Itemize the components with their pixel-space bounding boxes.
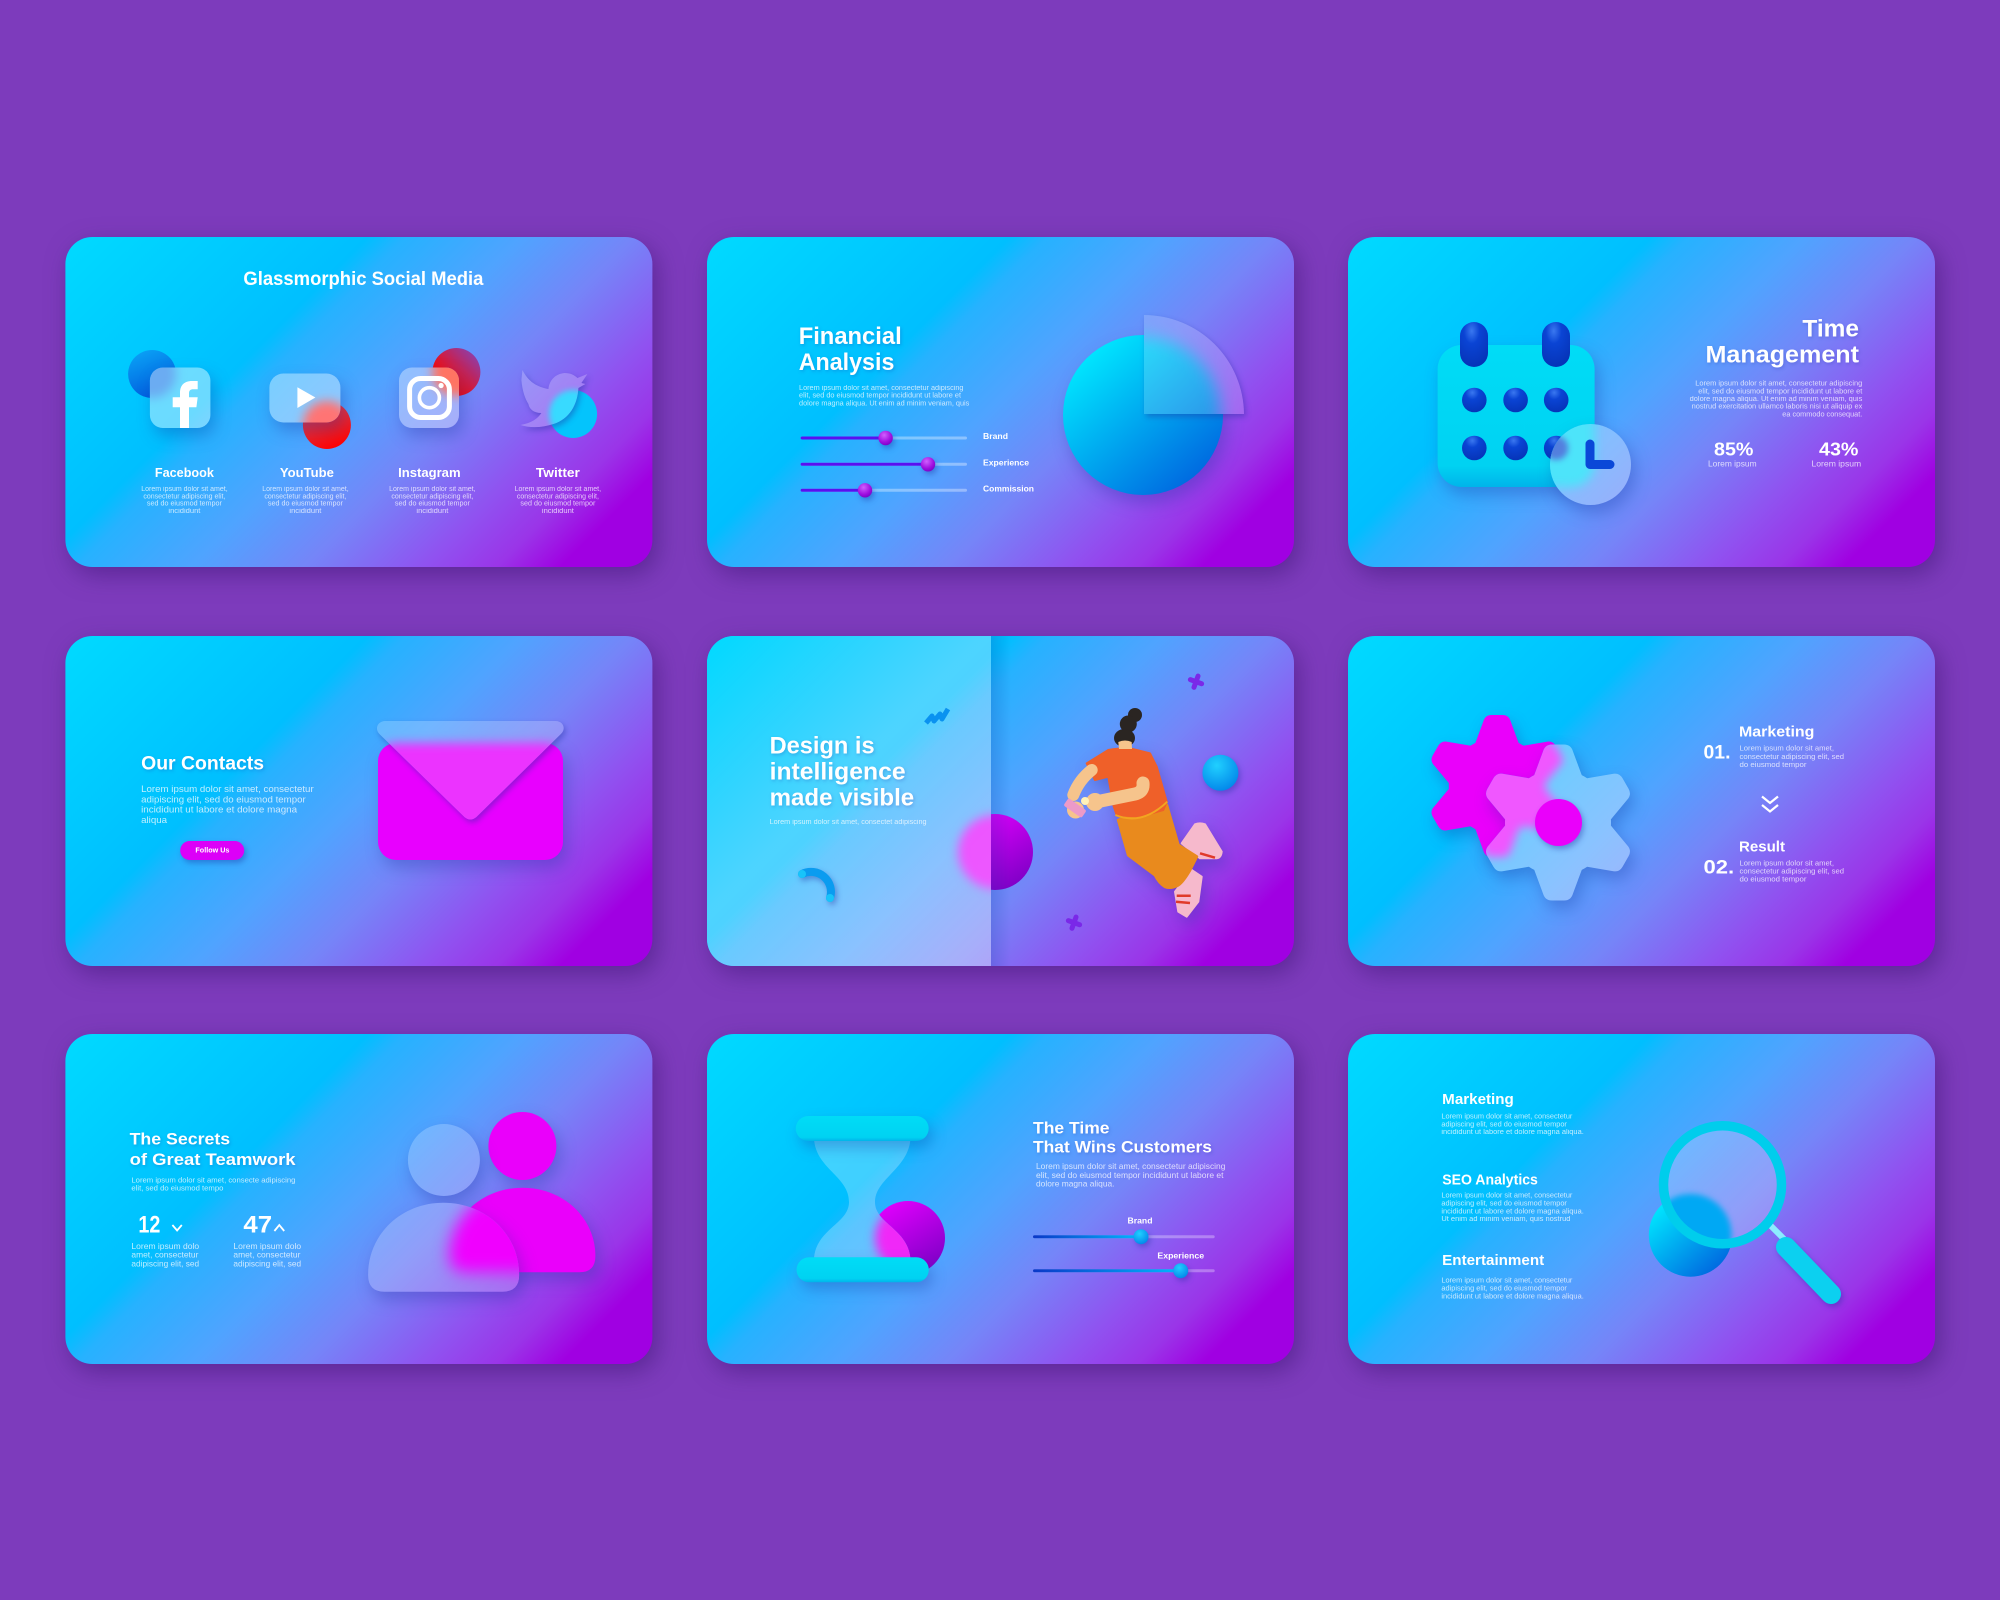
- heading: intelligence: [770, 758, 906, 785]
- icon: hourglass glass: [814, 1141, 910, 1258]
- arrow: double chevron: [1762, 796, 1778, 812]
- panel: gears steps: [1348, 636, 1935, 966]
- item: marketing: Marketing: [1442, 1091, 1514, 1108]
- text block: [131, 1175, 295, 1193]
- text: youtube description: consectetur adipiscing elit,: [264, 493, 346, 500]
- stat: 12: [131, 1212, 199, 1269]
- text: youtube description: [262, 486, 349, 515]
- panel: financial analysis: [707, 237, 1294, 567]
- text: twitter description: consectetur adipiscing elit,: [517, 493, 599, 500]
- icon: glass person: [368, 1124, 532, 1306]
- slider: brand: [1033, 1216, 1215, 1244]
- heading: [770, 732, 914, 812]
- item: entertainment: [1441, 1252, 1584, 1300]
- panel edge: [991, 636, 1011, 966]
- text: instagram description: incididunt: [416, 508, 448, 515]
- card background: [707, 237, 1294, 567]
- stat: 47: amet, consectetur: [233, 1250, 301, 1260]
- panel: glassmorphic social media: [65, 237, 652, 567]
- item: marketing: [1441, 1091, 1584, 1136]
- title: Glassmorphic Social Media: [243, 269, 484, 290]
- heading: Financial: [799, 323, 902, 350]
- button: follow us: Follow Us: [195, 848, 230, 855]
- card background: [707, 636, 1294, 966]
- text block: nostrud exercitation ullamco laboris nisi ut aliquip ex: [1692, 404, 1863, 411]
- label: twitter: Twitter: [536, 465, 580, 480]
- figure: floating person: [1063, 708, 1222, 917]
- step 02: [1704, 839, 1844, 884]
- icon: clock: [1546, 424, 1640, 518]
- item: seo analytics: [1441, 1171, 1584, 1223]
- stat: 12: Lorem ipsum dolo: [131, 1241, 199, 1251]
- text block: elit, sed do eiusmod tempor incididunt ut labore et: [1036, 1170, 1224, 1180]
- text block: Lorem ipsum dolor sit amet, consectetur adipiscing: [799, 385, 964, 392]
- card background: [65, 636, 652, 966]
- text: youtube description: Lorem ipsum dolor sit amet,: [262, 486, 349, 493]
- text block: [799, 385, 970, 407]
- stat: 85%: Lorem ipsum: [1708, 460, 1757, 469]
- icon: calendar: [1438, 322, 1595, 487]
- step 02: 02.: [1704, 857, 1734, 878]
- icon: youtube: [267, 374, 351, 449]
- heading: [130, 1130, 296, 1169]
- step 01: 01.: [1704, 742, 1730, 763]
- item: entertainment: Lorem ipsum dolor sit amet, consectetur: [1441, 1278, 1573, 1285]
- item: seo analytics: SEO Analytics: [1442, 1171, 1538, 1188]
- text block: incididunt ut labore et dolore magna: [141, 805, 298, 816]
- gear centre: [1535, 799, 1582, 846]
- heading: Time: [1802, 316, 1859, 343]
- text block: dolore magna aliqua. Ut enim ad minim veniam, quis: [1690, 396, 1863, 403]
- text: youtube description: sed do eiusmod tempor: [268, 501, 344, 508]
- text: youtube description: incididunt: [289, 508, 321, 515]
- text block: [1690, 381, 1863, 418]
- slider: commission: Commission: [983, 484, 1034, 493]
- text block: ea commodo consequat.: [1782, 411, 1862, 418]
- panel: hourglass: [707, 1034, 1294, 1364]
- shape: arc: [798, 870, 834, 902]
- heading: made visible: [770, 785, 914, 812]
- item: entertainment: incididunt ut labore et dolore magna aliqua.: [1441, 1293, 1584, 1300]
- stat: 43%: [1812, 440, 1862, 469]
- text: facebook description: consectetur adipiscing elit,: [143, 493, 225, 500]
- item: marketing: Lorem ipsum dolor sit amet, consectetur: [1441, 1114, 1573, 1121]
- text block: elit, sed do eiusmod tempo: [131, 1184, 223, 1193]
- text: twitter description: incididunt: [542, 508, 574, 515]
- stat: 12: amet, consectetur: [131, 1250, 199, 1260]
- text block: [141, 784, 314, 826]
- step 02: Result: [1739, 839, 1785, 856]
- shape: plus top: [1188, 674, 1204, 689]
- button: follow us: [180, 841, 244, 860]
- text: instagram description: Lorem ipsum dolor sit amet,: [389, 486, 476, 493]
- card background: [1348, 237, 1935, 567]
- stat: 85%: [1708, 440, 1757, 469]
- text: facebook description: [141, 486, 228, 515]
- glass panel: [707, 636, 991, 966]
- stat: 47: 47: [243, 1212, 272, 1239]
- item: marketing: adipiscing elit, sed do eiusmod tempor: [1441, 1122, 1568, 1129]
- label: facebook: Facebook: [155, 465, 215, 480]
- panel: marketing seo entertainment: [1348, 1034, 1935, 1364]
- slider: brand: Brand: [1128, 1216, 1152, 1226]
- text block: elit, sed do eiusmod tempor incididunt ut labore et: [799, 393, 961, 400]
- card background: [1348, 1034, 1935, 1364]
- slider: experience: Experience: [1157, 1250, 1204, 1260]
- shape: plus bottom: [1066, 915, 1082, 930]
- text block: Lorem ipsum dolor sit amet, consectetur: [141, 784, 314, 795]
- slider: brand: [801, 431, 1008, 445]
- sphere: blue: [1202, 755, 1238, 791]
- sphere: blue: [1649, 1193, 1732, 1277]
- step 01: Marketing: [1739, 724, 1814, 741]
- text: instagram description: sed do eiusmod tempor: [395, 501, 471, 508]
- heading: That Wins Customers: [1033, 1137, 1212, 1156]
- icon: instagram: [397, 348, 480, 441]
- text block: Lorem ipsum dolor sit amet, consectetur adipiscing: [1695, 381, 1862, 388]
- panel: our contacts: [65, 636, 652, 966]
- stat: 47: [233, 1212, 301, 1269]
- card background: [707, 1034, 1294, 1364]
- icon: facebook: [128, 350, 222, 444]
- card background: [1348, 636, 1935, 966]
- stat: 12: adipiscing elit, sed: [131, 1259, 199, 1269]
- heading: [1033, 1118, 1212, 1156]
- icon: hourglass bottom bar: [796, 1257, 929, 1282]
- heading: Our Contacts: [141, 753, 264, 774]
- text block: dolore magna aliqua. Ut enim ad minim veniam, quis: [799, 400, 970, 407]
- card background: [65, 1034, 652, 1364]
- text block: adipiscing elit, sed do eiusmod tempor: [141, 794, 306, 805]
- item: marketing: incididunt ut labore et dolore magna aliqua.: [1441, 1129, 1584, 1136]
- step 01: Lorem ipsum dolor sit amet,: [1740, 744, 1834, 753]
- heading: The Time: [1033, 1118, 1110, 1137]
- text: twitter description: Lorem ipsum dolor sit amet,: [515, 486, 601, 493]
- sphere: magenta: [871, 1201, 945, 1275]
- icon: envelope: [376, 721, 574, 874]
- icon: magnifier: [1658, 1121, 1846, 1310]
- step 02: consectetur adipiscing elit, sed: [1740, 867, 1844, 876]
- stat: 12: 12: [138, 1212, 160, 1239]
- slider: commission: [801, 483, 1034, 498]
- text: instagram description: consectetur adipiscing elit,: [391, 493, 473, 500]
- stat: 47: Lorem ipsum dolo: [233, 1241, 301, 1251]
- text: twitter description: sed do eiusmod tempor: [520, 501, 596, 508]
- icon: glass gear: [1483, 744, 1638, 914]
- label: youtube: YouTube: [280, 465, 334, 480]
- step 01: consectetur adipiscing elit, sed: [1740, 752, 1844, 761]
- text block: [1036, 1161, 1226, 1189]
- heading: of Great Teamwork: [130, 1150, 296, 1169]
- text block: aliqua: [141, 815, 168, 826]
- icon: twitter: [521, 370, 598, 438]
- item: seo analytics: incididunt ut labore et dolore magna aliqua.: [1441, 1208, 1584, 1215]
- step 01: do eiusmod tempor: [1740, 760, 1807, 769]
- slider: experience: [1033, 1250, 1215, 1278]
- pie chart: [1062, 315, 1248, 509]
- heading: Management: [1706, 342, 1859, 369]
- item: entertainment: adipiscing elit, sed do eiusmod tempor: [1441, 1286, 1568, 1293]
- text block: Lorem ipsum dolor sit amet, consectetur adipiscing: [1036, 1161, 1226, 1171]
- stat: 85%: 85%: [1714, 440, 1753, 460]
- stat: 43%: 43%: [1819, 440, 1858, 460]
- slider: experience: [801, 457, 1030, 472]
- shape: zigzag: [926, 709, 948, 723]
- item: entertainment: Entertainment: [1442, 1252, 1544, 1269]
- step 01: [1704, 724, 1844, 769]
- text: facebook description: incididunt: [168, 508, 200, 515]
- sphere: magenta: [957, 814, 1033, 890]
- text: facebook description: sed do eiusmod tempor: [147, 501, 223, 508]
- text: twitter description: [515, 486, 601, 515]
- item: seo analytics: Ut enim ad minim veniam, quis nostrud: [1441, 1216, 1571, 1223]
- heading: Design is: [770, 732, 875, 759]
- text: facebook description: Lorem ipsum dolor sit amet,: [141, 486, 228, 493]
- slider: experience: Experience: [983, 458, 1030, 467]
- item: seo analytics: adipiscing elit, sed do eiusmod tempor: [1441, 1201, 1568, 1208]
- icon: magenta gear: [1424, 715, 1570, 857]
- icon: hourglass top bar: [796, 1116, 929, 1141]
- heading: [1706, 316, 1859, 369]
- item: seo analytics: Lorem ipsum dolor sit amet, consectetur: [1441, 1193, 1573, 1200]
- text block: Lorem ipsum dolor sit amet, consecte adipiscing: [131, 1175, 295, 1184]
- stat: 43%: Lorem ipsum: [1812, 460, 1862, 469]
- panel: time management: [1348, 237, 1935, 567]
- step 02: do eiusmod tempor: [1740, 875, 1807, 884]
- heading: [799, 323, 902, 376]
- text block: dolore magna aliqua.: [1036, 1179, 1114, 1189]
- panel: design is intelligence: [707, 636, 1294, 966]
- step 02: Lorem ipsum dolor sit amet,: [1740, 858, 1834, 867]
- slider: brand: Brand: [983, 432, 1008, 441]
- panel: teamwork: [65, 1034, 652, 1364]
- text block: elit, sed do eiusmod tempor incididunt ut labore et: [1698, 388, 1862, 395]
- heading: Analysis: [799, 349, 894, 376]
- stat: 47: adipiscing elit, sed: [233, 1259, 301, 1269]
- label: instagram: Instagram: [398, 465, 461, 480]
- card background: [65, 237, 652, 567]
- icon: magenta person: [449, 1112, 595, 1272]
- text block: Lorem ipsum dolor sit amet, consectet adipiscing: [770, 819, 927, 826]
- heading: The Secrets: [130, 1130, 230, 1149]
- text: instagram description: [389, 486, 476, 515]
